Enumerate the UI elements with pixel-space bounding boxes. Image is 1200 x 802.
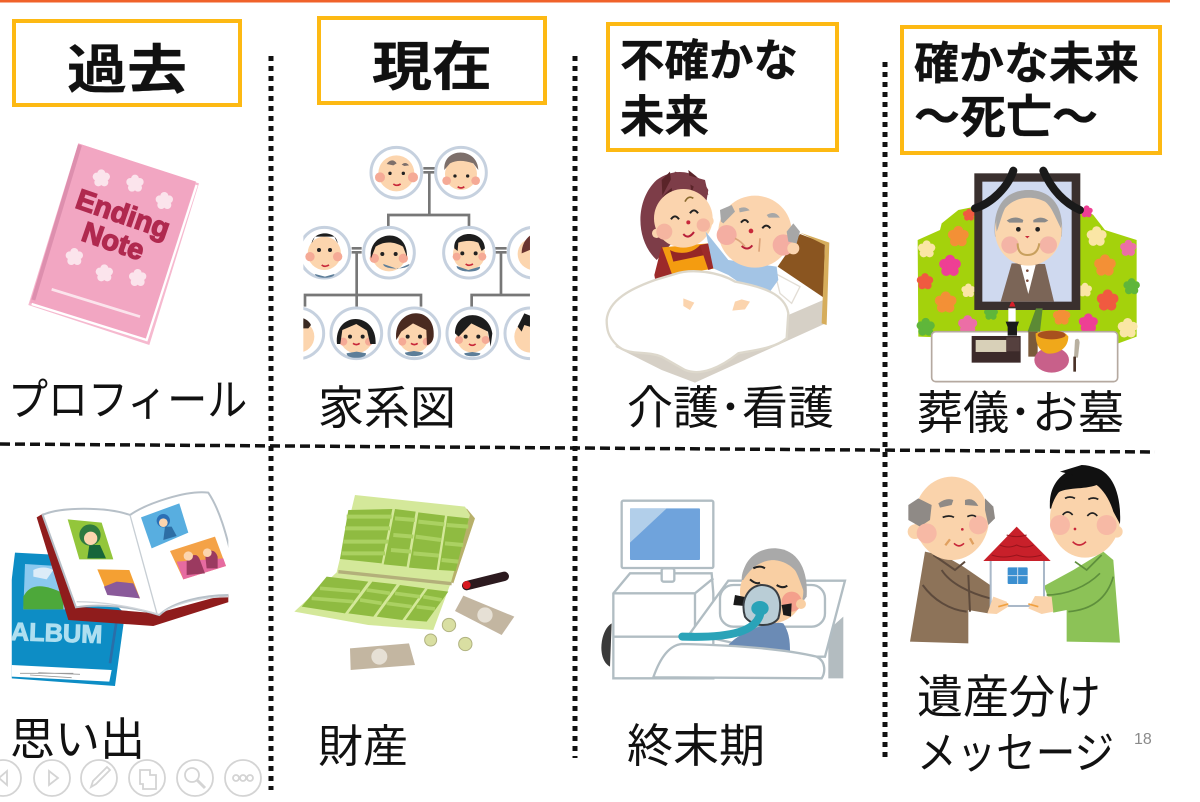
heading: uncertain future bbox=[608, 24, 837, 150]
heading: certain future, death: 確かな未来 bbox=[914, 38, 1139, 89]
icon: ending note book bbox=[28, 143, 199, 345]
label: terminal stage: 終末期 bbox=[627, 720, 765, 772]
label: profile: プロフィール bbox=[8, 375, 247, 424]
icon: family tree bbox=[303, 146, 530, 360]
icon: photo albums bbox=[10, 492, 230, 686]
heading: present: 現在 bbox=[372, 37, 492, 96]
label: inheritance division and message bbox=[917, 671, 1114, 777]
heading: uncertain future: 不確かな bbox=[620, 37, 798, 86]
heading: certain future, death bbox=[902, 27, 1160, 153]
heading: present bbox=[319, 18, 545, 103]
heading: certain future, death: ～死亡～ bbox=[914, 91, 1098, 143]
label: nursing care: 介護･看護 bbox=[627, 382, 834, 434]
heading: past bbox=[14, 21, 240, 105]
icon: passing on a house bbox=[908, 465, 1123, 643]
heading: uncertain future: 未来 bbox=[620, 93, 709, 142]
label: family tree: 家系図 bbox=[318, 382, 456, 434]
slide number: 18 bbox=[1134, 731, 1152, 748]
icon: photo albums: ALBUM bbox=[10, 618, 103, 649]
icon: funeral altar bbox=[917, 171, 1140, 382]
label: memories: 思い出 bbox=[10, 714, 145, 765]
heading: past: 過去 bbox=[67, 40, 187, 99]
label: inheritance division and message: メッセージ bbox=[917, 728, 1114, 777]
icon: ending note book: Ending bbox=[72, 184, 174, 246]
label: funeral and grave: 葬儀･お墓 bbox=[917, 387, 1124, 439]
icon: ending note book: Note bbox=[78, 216, 148, 267]
icon: bankbook and money bbox=[294, 495, 514, 670]
icon: terminal care bed bbox=[601, 501, 845, 678]
label: inheritance division and message: 遺産分け bbox=[917, 671, 1101, 723]
icon: nursing care bbox=[607, 170, 829, 383]
label: assets: 財産 bbox=[318, 721, 408, 772]
presentation controls bbox=[0, 760, 261, 796]
